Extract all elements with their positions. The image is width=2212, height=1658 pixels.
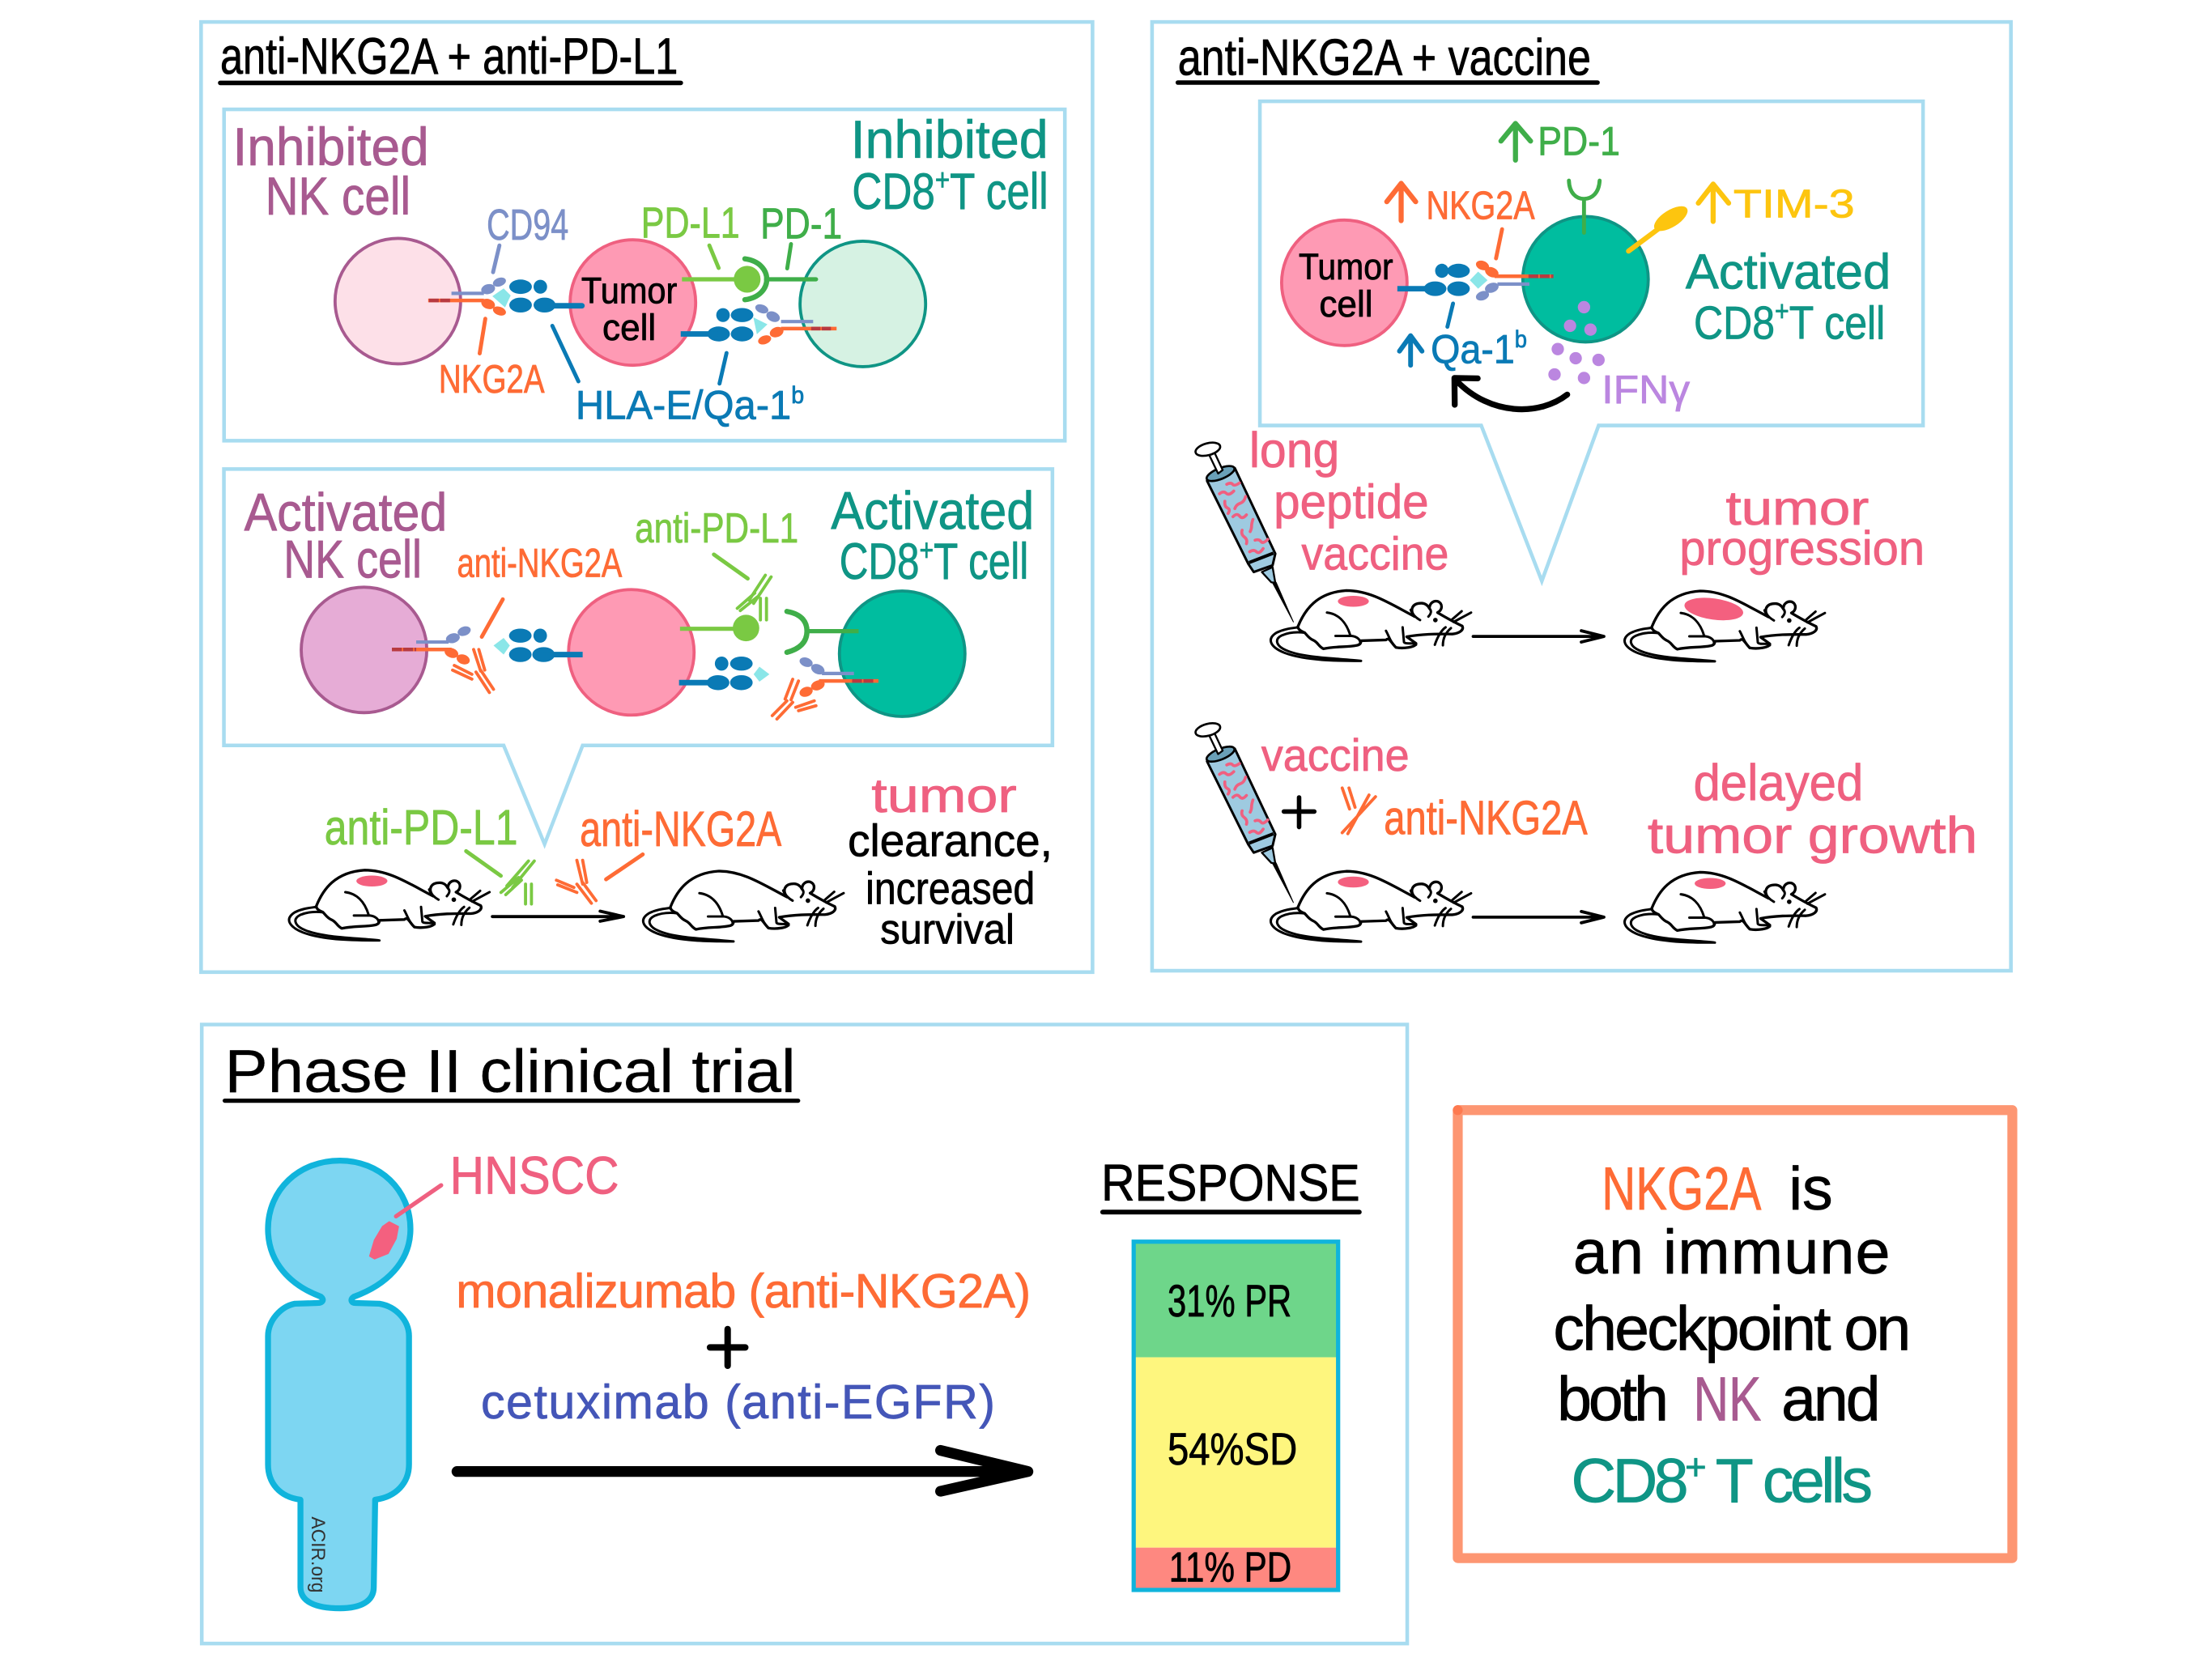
label: anti-NKG2A treatment: anti-NKG2A: [580, 801, 782, 857]
label: long peptide vaccine: [1249, 423, 1448, 580]
label: Inhibited NK cell: Inhibited: [233, 117, 429, 177]
segment: 54% SD: 54%SD: [1168, 1424, 1297, 1474]
text: monalizumab: monalizumab (anti-NKG2A): [456, 1264, 1031, 1318]
label: HLA-E/Qa-1b: b: [791, 382, 804, 409]
takeaway line 4: both: [1557, 1365, 1669, 1435]
mouse: vaccinated with small tumor: [1270, 590, 1471, 661]
label: anti-NKG2A treatment: [580, 801, 782, 879]
icon: syringe long peptide vaccine: [1194, 440, 1293, 622]
receptors: NK cell side: [392, 625, 472, 666]
takeaway line 5: +: [1685, 1446, 1707, 1487]
label: NKG2A: [439, 319, 545, 402]
label: long peptide vaccine: peptide: [1274, 474, 1429, 529]
label: anti-PD-L1 treatment: anti-PD-L1: [325, 800, 517, 855]
takeaway line 3: checkpoint on: [1553, 1295, 1911, 1364]
outcome text: increased: [866, 864, 1035, 914]
callout: activated cells: [224, 469, 1053, 844]
callout: checkpoint upregulation: [1260, 101, 1923, 581]
mouse: large tumor: [1625, 591, 1825, 661]
label: NKG2A: NKG2A: [439, 358, 545, 402]
label: tumor progression: progression: [1679, 521, 1925, 576]
watermark: ACIR.org: ACIR.org: [307, 1516, 329, 1592]
receptor: PD-1: [1569, 181, 1600, 232]
label: Tumor cell: [1299, 246, 1393, 325]
label: CD94: [487, 201, 568, 272]
sub-panel: inhibited cells: [224, 109, 1065, 440]
mouse: vaccine plus anti-NKG2A: [1270, 871, 1471, 942]
mouse: delayed tumor: [1625, 872, 1825, 942]
marker: up Qa-1b: b: [1515, 326, 1527, 353]
HLA-E complex: tumor right side: [679, 657, 769, 690]
takeaway line 1: NKG2A: [1602, 1154, 1762, 1222]
heading: anti-NKG2A + vaccine: anti-NKG2A + vaccine: [1178, 29, 1591, 86]
text: plus: [710, 1329, 745, 1366]
marker: up NKG2A: NKG2A: [1427, 185, 1535, 228]
label: PD-L1: [641, 199, 740, 268]
IFN gamma dots: [1548, 301, 1605, 385]
label: Inhibited CD8+ T cell: [851, 110, 1049, 220]
panel: anti-NKG2A + vaccine: [1152, 22, 2011, 971]
label: HLA-E/Qa-1b: [552, 325, 804, 427]
segment: 31% PR: 31% PR: [1168, 1276, 1291, 1326]
lower section: mouse experiments: [1194, 423, 1977, 942]
receptor: TIM-3: [1628, 202, 1691, 251]
segment: 54% SD: [1134, 1358, 1338, 1548]
stacked bar: response rates: [1134, 1242, 1338, 1591]
label: Activated NK cell: NK cell: [283, 529, 422, 589]
segment: 31% PR: [1134, 1242, 1338, 1358]
label: Activated CD8+ T cell: [1686, 244, 1891, 349]
marker: up Qa-1b: Qa-1: [1431, 325, 1521, 372]
label: delayed tumor growth: [1648, 755, 1977, 864]
label: long peptide vaccine: vaccine: [1301, 529, 1448, 580]
plus sign: [1284, 797, 1314, 827]
marker: up TIM-3: TIM-3: [1733, 182, 1855, 226]
outcome text: clearance,: [848, 815, 1053, 865]
label: HNSCC: [396, 1146, 619, 1216]
label: Activated CD8+ T cell: +: [1775, 295, 1789, 327]
HLA-E complex: tumor left side: [494, 629, 583, 662]
cell: tumor cell: [568, 589, 694, 715]
label: Activated CD8+ T cell: CD8: [1694, 297, 1787, 349]
takeaway line 4: [1557, 1365, 1881, 1435]
antibody: anti-NKG2A on NK cell: [453, 649, 494, 692]
antibody: anti-PD-L1 on PD-L1: [738, 575, 771, 620]
icon: patient figure: [268, 1161, 410, 1609]
label: Inhibited CD8+ T cell: CD8: [852, 164, 954, 220]
heading: RESPONSE: RESPONSE: [1101, 1154, 1360, 1212]
label: CD94: CD94: [487, 201, 568, 249]
callout: key takeaway: [1453, 1105, 2012, 1558]
outcome text: [848, 768, 1053, 954]
receptors: T cell side: [798, 656, 878, 699]
label: Activated CD8+ T cell: T cell: [1789, 297, 1885, 349]
cell: inhibited CD8 T cell: [800, 241, 925, 367]
label: Activated CD8+ T cell: Activated: [831, 481, 1034, 541]
arrow: vaccine outcome: [1474, 631, 1604, 642]
text: cetuximab: cetuximab (anti-EGFR): [481, 1375, 995, 1429]
label: anti-PD-L1 treatment: [325, 800, 517, 876]
label: Activated NK cell: Activated: [244, 483, 447, 542]
label: anti-PD-L1: [635, 505, 798, 579]
cell: activated CD8 T cell: [1523, 216, 1648, 342]
cell: tumor cell: [1282, 220, 1407, 346]
label: anti-NKG2A: anti-NKG2A: [457, 540, 623, 586]
cell: activated CD8 T cell: [840, 591, 965, 716]
arrow: treatment to response: [457, 1451, 1028, 1491]
label: HNSCC: HNSCC: [450, 1146, 619, 1206]
PD-L1 / PD-1 binding: [682, 259, 816, 300]
segment: 11% PD: 11% PD: [1169, 1544, 1291, 1591]
label: Activated CD8+ T cell: T cell: [934, 534, 1028, 590]
antibody: anti-NKG2A: [556, 861, 596, 903]
label: Inhibited CD8+ T cell: +: [935, 163, 950, 198]
icon: syringe vaccine: [1194, 721, 1293, 903]
label: Activated CD8+ T cell: Activated: [1686, 244, 1891, 300]
marker: up TIM-3: [1699, 182, 1855, 226]
label: Tumor cell: cell: [602, 307, 656, 348]
marker: up NKG2A: [1387, 184, 1535, 228]
label: Activated NK cell: [244, 483, 447, 589]
callout contents: [1282, 118, 1891, 412]
takeaway line 2: an immune: [1573, 1218, 1891, 1287]
tumor on patient head: [370, 1222, 398, 1259]
cell: tumor cell: [570, 240, 696, 365]
outcome text: survival: [880, 907, 1015, 954]
label: Tumor cell: [581, 270, 677, 348]
receptor complex: NK side: [428, 276, 582, 317]
label: Inhibited NK cell: [233, 117, 429, 227]
antibody: anti-PD-L1: [501, 861, 534, 904]
label: Tumor cell: Tumor: [581, 270, 677, 312]
sub-panel: activated cells and mouse treatment: [224, 469, 1053, 954]
label: IFN gamma: IFNγ: [1602, 368, 1691, 412]
label: Tumor cell: cell: [1319, 283, 1373, 325]
label: Inhibited CD8+ T cell: Inhibited: [851, 110, 1049, 170]
cell: activated NK cell: [301, 587, 427, 712]
label: Activated CD8+ T cell: [831, 481, 1034, 590]
label: vaccine: vaccine: [1261, 730, 1410, 780]
label: tumor progression: tumor: [1725, 481, 1869, 535]
label: delayed tumor growth: delayed: [1693, 755, 1863, 811]
mouse: treated with tumor: [289, 870, 490, 941]
label: delayed tumor growth: tumor growth: [1648, 807, 1977, 864]
takeaway line 5: T cells: [1703, 1446, 1873, 1516]
marker: up PD-1: [1501, 118, 1620, 164]
panel: Phase II clinical trial: [202, 1025, 1407, 1643]
outcome text: tumor: [871, 768, 1017, 823]
label: anti-NKG2A: [457, 540, 623, 637]
label: PD-L1: PD-L1: [641, 199, 740, 248]
PD-L1 and PD-1 separated: [680, 611, 858, 653]
takeaway line 5: CD8: [1571, 1446, 1689, 1516]
heading: Phase II clinical trial: Phase II clinical trial: [225, 1037, 796, 1105]
takeaway line 4: NK: [1694, 1365, 1761, 1435]
antibody: anti-NKG2A: [1342, 788, 1376, 834]
heading: anti-NKG2A + anti-PD-L1: anti-NKG2A + anti-PD-L1: [220, 28, 678, 85]
receptor complex: [1397, 229, 1554, 327]
label: anti-PD-L1: anti-PD-L1: [635, 505, 798, 552]
antibody: anti-NKG2A on T cell: [772, 679, 816, 719]
arrow: combination outcome: [1474, 912, 1604, 923]
mouse: tumor cleared: [643, 871, 844, 942]
label: PD-1: PD-1: [760, 199, 842, 248]
label: anti-NKG2A: anti-NKG2A: [1384, 791, 1588, 845]
receptor complex: T cell side: [681, 303, 836, 346]
cell: inhibited NK cell: [335, 238, 461, 363]
label: Inhibited CD8+ T cell: T cell: [950, 164, 1049, 220]
label: PD-1: [760, 199, 842, 269]
marker: up PD-1: PD-1: [1538, 118, 1620, 164]
arrow: IFN gamma upregulates Qa-1b: [1454, 378, 1568, 410]
label: Activated CD8+ T cell: CD8: [840, 534, 941, 590]
label: long peptide vaccine: long: [1249, 423, 1339, 478]
label: HLA-E/Qa-1b: HLA-E/Qa-1: [576, 381, 798, 427]
label: Tumor cell: Tumor: [1299, 246, 1393, 287]
takeaway line 4: and: [1781, 1365, 1881, 1435]
label: tumor progression: [1679, 481, 1925, 576]
label: Inhibited NK cell: NK cell: [266, 167, 410, 227]
takeaway line 1: is: [1789, 1154, 1833, 1222]
label: Activated CD8+ T cell: +: [920, 534, 934, 568]
arrow: treatment outcome: [492, 912, 623, 921]
panel: anti-NKG2A + anti-PD-L1: [201, 22, 1092, 972]
